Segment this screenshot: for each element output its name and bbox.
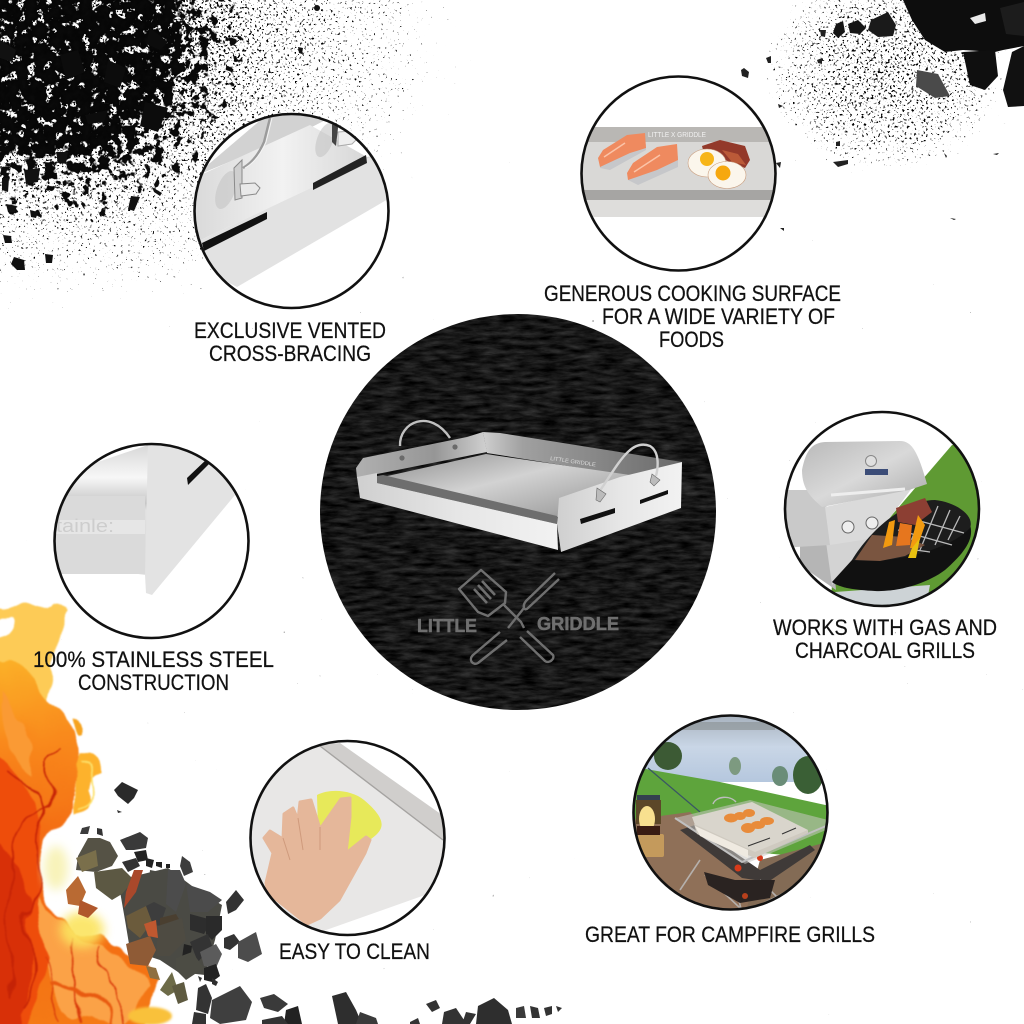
- heading: vented cross-bracing caption: CROSS-BRACING: [209, 341, 371, 366]
- heading: vented cross-bracing caption: [194, 318, 386, 366]
- icon: spatula: [459, 570, 553, 662]
- logo: little griddle: LITTLE: [417, 615, 477, 636]
- heading: stainless steel caption: 100% STAINLESS STEEL: [33, 647, 274, 672]
- panel: gas and charcoal grills photo: [780, 412, 990, 612]
- heading: easy to clean caption: EASY TO CLEAN: [279, 939, 430, 964]
- lantern: [636, 795, 664, 857]
- panel: vented cross-bracing photo: [190, 110, 395, 308]
- panel: easy to clean photo: [240, 740, 450, 940]
- logo: little griddle: GRIDDLE: [537, 613, 619, 634]
- heading: stainless steel caption: CONSTRUCTION: [78, 670, 229, 695]
- panel: generous cooking surface photo: [580, 76, 777, 270]
- charcoal kettle: [832, 498, 971, 612]
- heading: gas and charcoal caption: [773, 615, 997, 663]
- bacon and eggs: [688, 140, 750, 188]
- charcoal pile bottom left: [66, 782, 562, 1024]
- panel: stainless steel construction photo: [52, 444, 248, 638]
- salmon steaks: [598, 133, 678, 185]
- charcoal pile top right: [741, 0, 1024, 231]
- heading: gas and charcoal caption: WORKS WITH GAS AND: [773, 615, 997, 640]
- heading: campfire grills caption: GREAT FOR CAMPFIRE GRILLS: [585, 922, 875, 947]
- faint engraving: tainle:: [56, 516, 114, 536]
- gas grill: [780, 441, 927, 590]
- fire pit frame: [675, 800, 828, 909]
- pale glow beside fire: [44, 846, 172, 1024]
- sponge: [317, 790, 382, 850]
- heading: vented cross-bracing caption: EXCLUSIVE VENTED: [194, 318, 386, 343]
- heading: gas and charcoal caption: CHARCOAL GRILLS: [795, 638, 975, 663]
- logo: little griddle: [417, 570, 619, 664]
- heading: cooking surface caption: [544, 281, 841, 352]
- griddle with shrimp: [692, 797, 808, 858]
- panel: campfire grills photo: [630, 712, 835, 915]
- hand: [264, 798, 370, 924]
- heading: cooking surface caption: FOR A WIDE VARIETY OF: [602, 304, 835, 329]
- heading: cooking surface caption: GENEROUS COOKING SURFACE: [544, 281, 841, 306]
- fire bottom left: [0, 606, 158, 1024]
- panel: central griddle on charred wood: [310, 304, 726, 720]
- griddle logo: LITTLE X GRIDDLE: [648, 132, 706, 139]
- charcoal dust top left: [0, 0, 480, 330]
- griddle product: [356, 421, 682, 552]
- icon: fork: [471, 573, 559, 664]
- heading: cooking surface caption: FOODS: [659, 327, 724, 352]
- griddle engraving: LITTLE GRIDDLE: [550, 456, 596, 468]
- heading: stainless steel caption: [33, 647, 274, 695]
